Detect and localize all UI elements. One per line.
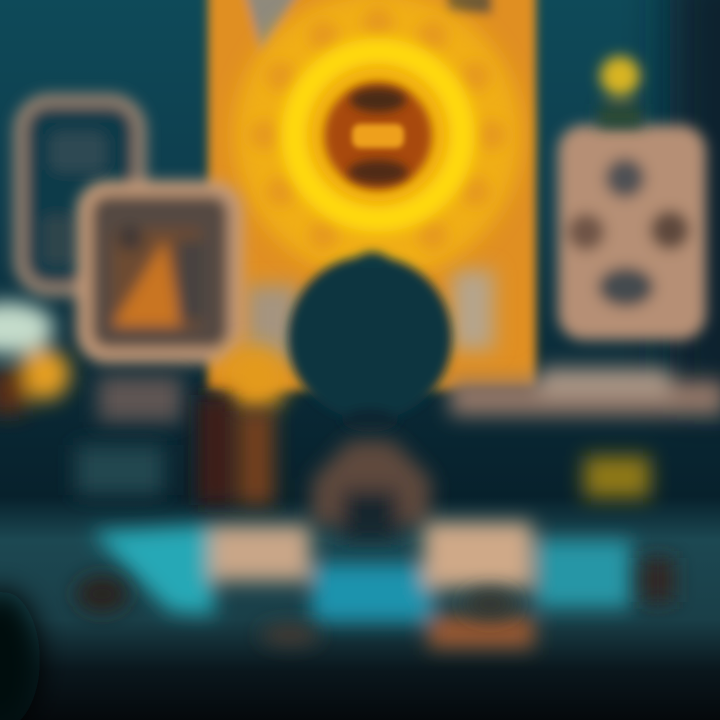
small dark objects on table: [76, 558, 674, 645]
icon: glowing lamp at left edge: [0, 302, 70, 414]
icon: dark circle figure head: [288, 252, 452, 432]
shelf band: [98, 344, 720, 422]
dark foreground corner: [0, 590, 40, 720]
dark bottles and figure body: [76, 395, 432, 540]
icon: left back frame: [20, 100, 140, 290]
table with cyan and cream sheets: [92, 522, 631, 648]
icon: yellow box on dark shelf: [584, 456, 650, 498]
panel: orange banner: [208, 0, 536, 390]
icon: right tan panel: [558, 125, 706, 340]
icon: left front frame: [84, 188, 236, 356]
dark right wall shading: [670, 0, 720, 400]
icon: small yellow star: [598, 56, 642, 128]
icon: sun: [234, 0, 522, 279]
grey patches beside the figure: [245, 270, 494, 365]
